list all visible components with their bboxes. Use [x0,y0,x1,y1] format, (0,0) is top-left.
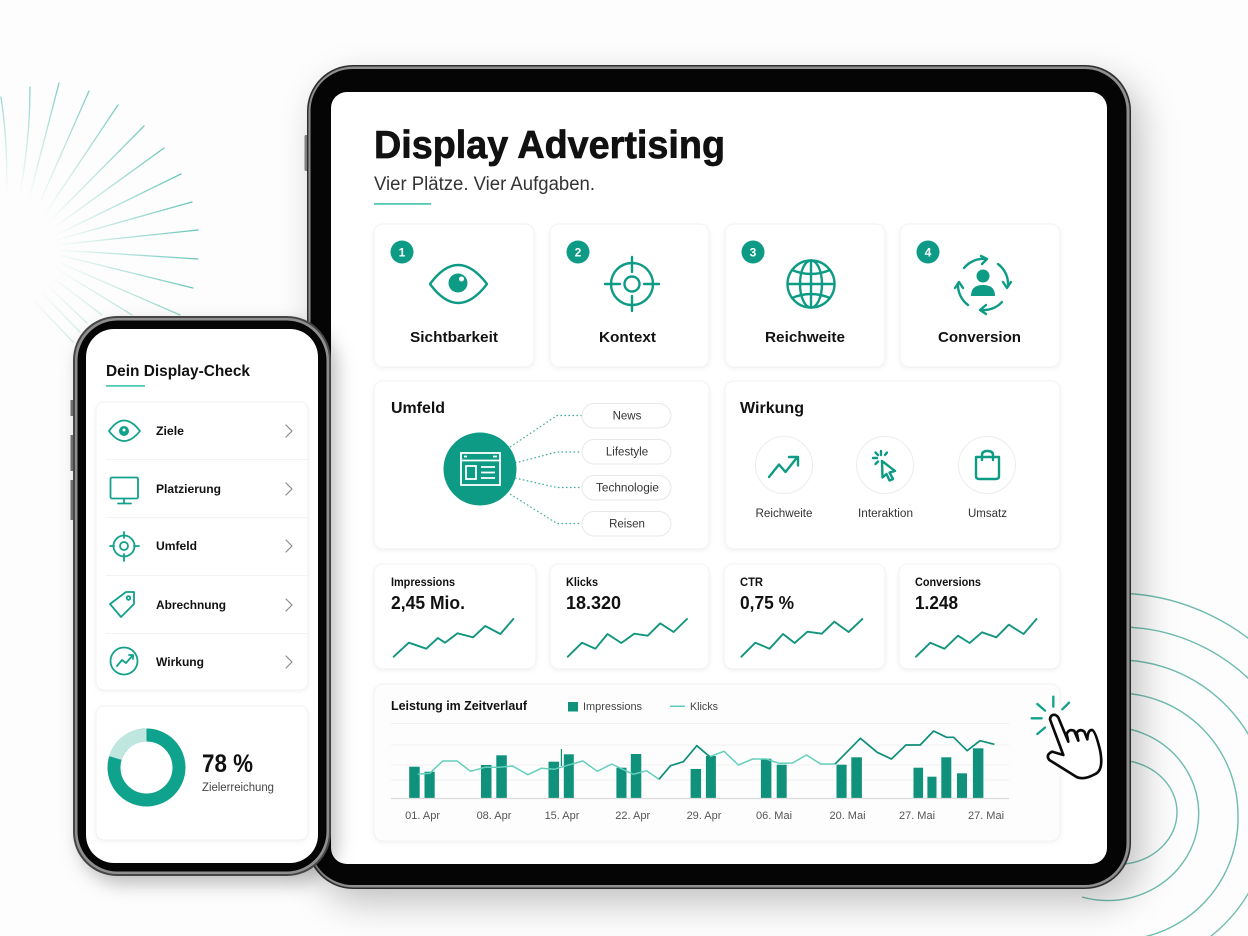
tablet side button [304,135,308,171]
panel: Reichweite [725,224,885,367]
donut chart [114,735,179,800]
panel: Conversion: 4 [925,246,932,260]
legend: Klicks [690,701,718,713]
background sunburst rays [1,83,198,342]
row: Umfeld [110,532,292,561]
legend: Impressions [583,701,642,713]
legend [568,701,718,713]
phone heading underline [106,385,145,387]
panel: checklist [96,402,308,690]
panel: Kontext: 2 [575,246,582,260]
KPI: Conversions: 1.248 [915,593,958,613]
icon: conversion cycle [955,256,1011,314]
row: Ziele: Ziele [156,424,184,438]
panel: Umfeld [374,381,709,549]
KPI: Impressions: Impressions [391,577,455,589]
panel: Conversion: Conversion [938,329,1021,346]
axis labels: 15. Apr [545,810,580,822]
icon: globe [788,260,834,308]
panel: goal donut [96,706,308,840]
panel: goal donut: Zielerreichung [202,782,274,794]
axis labels: 08. Apr [477,810,512,822]
axis labels: 01. Apr [405,810,440,822]
KPI: CTR: 0,75 % [740,593,794,613]
panel: Kontext: Kontext [599,329,656,346]
icon: target [605,257,659,311]
KPI: CTR [724,564,885,669]
KPI: Conversions: Conversions [915,577,981,589]
phone device [72,316,331,876]
pill: News: News [613,410,642,422]
row: Abrechnung [110,592,292,617]
panel: Sichtbarkeit [374,224,534,367]
row: Abrechnung: Abrechnung [156,598,226,612]
pill: Reisen: Reisen [609,518,645,530]
panel: goal donut: 78 % [202,750,253,778]
phone side buttons [70,400,74,520]
axis labels: 27. Mai [968,810,1004,822]
phone heading: Dein Display-Check [106,363,250,380]
row: Wirkung [110,648,292,674]
metric: Interaktion: Interaktion [858,508,913,520]
panel: Reichweite: 3 [750,246,757,260]
panel: Conversion [900,224,1060,367]
row: Platzierung [110,478,292,504]
row: Ziele [109,420,292,441]
KPI: Impressions [374,564,536,669]
tablet device [304,65,1131,889]
background concentric arcs [1082,593,1248,936]
pill: Reisen [582,512,671,536]
icon: pointing hand [1032,697,1101,778]
KPI: Klicks: Klicks [566,577,598,589]
KPI: Impressions: 2,45 Mio. [391,593,465,613]
panel: Reichweite: Reichweite [765,329,845,346]
pill: Technologie: Technologie [596,482,659,494]
metric: Reichweite [756,436,812,520]
KPI: Klicks [550,564,709,669]
KPI: CTR: CTR [740,577,764,589]
axis labels: 27. Mai [899,810,935,822]
axis labels: 20. Mai [829,810,866,822]
metric: Umsatz: Umsatz [968,508,1007,520]
icon: eye [430,265,487,303]
pill: Technologie [582,476,671,500]
phone screen [86,329,318,863]
panel: Sichtbarkeit: Sichtbarkeit [410,329,498,346]
axis labels [405,810,1004,822]
icon: website hub [444,432,516,506]
dotted connectors [510,416,582,524]
subtitle: Vier Plätze. Vier Aufgaben. [374,174,595,195]
axis labels: 29. Apr [687,810,722,822]
panel: Leistung im Zeitverlauf: Leistung im Zeitverlauf [391,699,528,713]
panel: Umfeld: Umfeld [391,400,445,417]
panel: Wirkung: Wirkung [740,400,804,417]
pill: Lifestyle [582,440,671,464]
axis labels: 22. Apr [615,810,650,822]
panel: Leistung im Zeitverlauf [374,684,1060,841]
metric: Interaktion [856,436,914,520]
metric: Reichweite: Reichweite [756,508,812,520]
panel: Sichtbarkeit: 1 [399,246,406,260]
axis labels: 06. Mai [756,810,792,822]
row: Platzierung: Platzierung [156,482,221,496]
panel: Kontext [550,224,709,367]
title underline [374,203,431,205]
pill: News [582,404,671,428]
panel: Wirkung [725,381,1060,549]
KPI: Klicks: 18.320 [566,593,621,613]
bar and line chart [391,724,1009,798]
title: Display Advertising [374,124,725,167]
row: Umfeld: Umfeld [156,539,197,553]
KPI: Conversions [899,564,1060,669]
pill: Lifestyle: Lifestyle [606,446,648,458]
row: Wirkung: Wirkung [156,655,204,669]
tablet screen [331,92,1107,864]
metric: Umsatz [958,436,1016,520]
